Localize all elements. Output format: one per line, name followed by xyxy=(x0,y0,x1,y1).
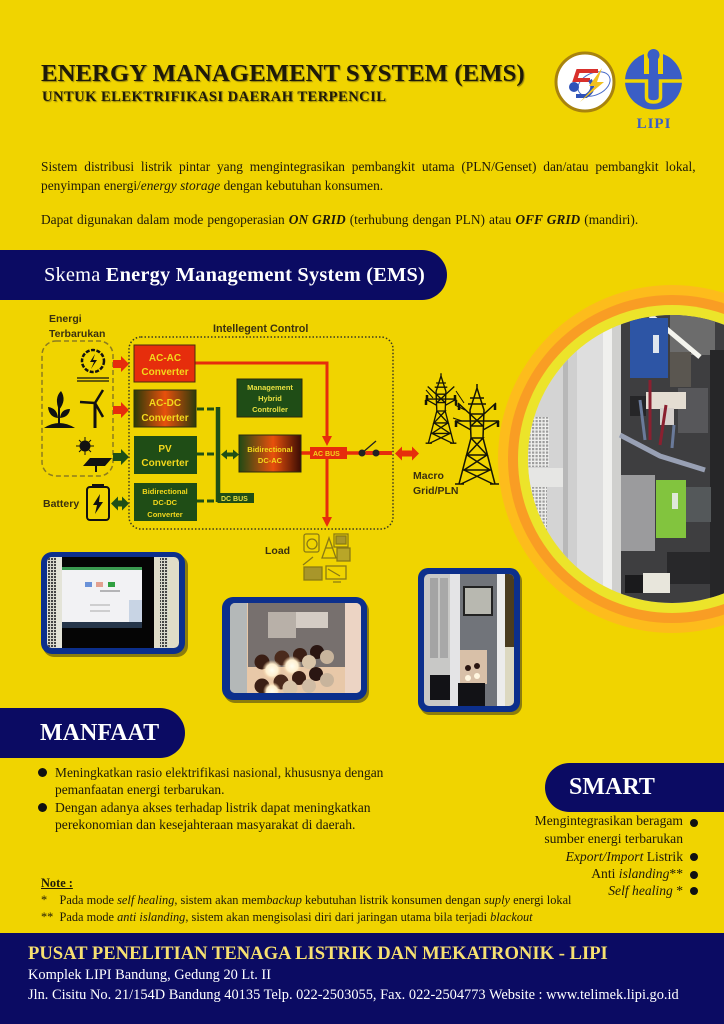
DC bus label: DC BUS xyxy=(221,496,248,503)
management hybrid controller xyxy=(237,379,302,417)
bidirectional DC-DC converter: Bidirectional xyxy=(142,487,188,496)
benefits list: Dengan adanya akses terhadap listrik dapat meningkatkan xyxy=(55,800,371,815)
AC-DC converter: AC-DC xyxy=(149,398,181,409)
PV converter: Converter xyxy=(141,458,189,469)
logos xyxy=(554,49,682,132)
PV converter xyxy=(134,436,197,474)
transmission towers xyxy=(426,373,499,484)
logo: LIPI: LIPI xyxy=(637,116,671,132)
intro paragraph xyxy=(41,159,696,193)
intro paragraph: Sistem distribusi listrik pintar yang mengintegrasikan pembangkit utama (PLN/Genset) dan/atau pembangkit lokal, xyxy=(41,159,696,174)
heading: Skema EMS: Skema Energy Management System (EMS) xyxy=(44,264,425,286)
renewable energy group: Terbarukan xyxy=(49,328,105,340)
heading: Manfaat: MANFAAT xyxy=(40,720,159,746)
AC-AC converter: AC-AC xyxy=(149,353,181,364)
photo circle: EMS cabinet xyxy=(498,285,724,633)
heading: Skema EMS xyxy=(0,250,447,300)
notes xyxy=(41,876,572,924)
notes: Note : xyxy=(41,876,73,890)
smart list: Export/Import Listrik xyxy=(566,849,683,864)
management hybrid controller: Management xyxy=(247,383,293,392)
heading: Manfaat xyxy=(0,708,185,758)
logo: anniversary badge xyxy=(556,53,614,111)
benefits list xyxy=(38,765,384,832)
management hybrid controller: Hybrid xyxy=(258,394,282,403)
smart list: Mengintegrasikan beragam xyxy=(535,813,683,828)
footer: Komplek LIPI Bandung, Gedung 20 Lt. II xyxy=(28,967,271,983)
connecting lines xyxy=(195,363,392,518)
bidirectional DC-DC converter xyxy=(134,483,197,521)
EMS schematic diagram xyxy=(41,313,500,583)
benefits list: perekonomian dan kesejahteraan masyarakat di daerah. xyxy=(55,817,355,832)
notes: ** Pada mode anti islanding, sistem akan mengisolasi diri dari jaringan utama bila terjadi blackout xyxy=(41,910,533,924)
battery: Battery xyxy=(43,498,79,510)
AC-DC converter xyxy=(134,390,196,427)
notes: * Pada mode self healing, sistem akan membackup kebutuhan listrik konsumen dengan suply energi lokal xyxy=(41,893,572,907)
intelligent control frame: Intellegent Control xyxy=(213,323,308,335)
bidirectional DC-AC: DC-AC xyxy=(258,456,283,465)
footer: Jln. Cisitu No. 21/154D Bandung 40135 Telp. 022-2503055, Fax. 022-2504773 Website : www.telimek.lipi.go.id xyxy=(28,987,679,1003)
input arrows xyxy=(111,356,129,510)
smart list: Self healing * xyxy=(608,883,683,898)
renewable energy group xyxy=(42,313,113,476)
footer xyxy=(0,933,724,1024)
macro grid label xyxy=(413,470,459,497)
AC-DC converter: Converter xyxy=(141,413,189,424)
macro grid label: Grid/PLN xyxy=(413,485,459,497)
macro grid label: Macro xyxy=(413,470,444,482)
battery xyxy=(43,484,109,520)
bidirectional DC-DC converter: Converter xyxy=(147,510,183,519)
intro paragraph: penyimpan energi/energy storage dengan kebutuhan konsumen. xyxy=(41,178,383,193)
smart list xyxy=(535,813,698,898)
smart list: sumber energi terbarukan xyxy=(544,831,683,846)
operating modes paragraph: Dapat digunakan dalam mode pengoperasian ON GRID (terhubung dengan PLN) atau OFF GRID (mandiri). xyxy=(41,212,638,227)
photo: cabinet xyxy=(418,568,522,715)
heading: Smart: SMART xyxy=(569,774,655,800)
smart list: Anti islanding** xyxy=(591,866,683,881)
PV converter: PV xyxy=(158,444,172,455)
management hybrid controller: Controller xyxy=(252,405,288,414)
AC bus label xyxy=(310,447,347,459)
bidirectional DC-AC xyxy=(239,435,301,472)
photo: light bulbs xyxy=(222,597,369,703)
benefits list: pemanfaatan energi terbarukan. xyxy=(55,782,224,797)
DC bus label xyxy=(218,493,254,503)
subtitle: UNTUK ELEKTRIFIKASI DAERAH TERPENCIL xyxy=(42,89,386,105)
bidirectional DC-DC converter: DC-DC xyxy=(153,498,178,507)
renewable energy group: Energi xyxy=(49,313,82,325)
AC-AC converter: Converter xyxy=(141,367,189,378)
AC bus label: AC BUS xyxy=(313,451,340,458)
title: ENERGY MANAGEMENT SYSTEM (EMS) xyxy=(41,60,525,87)
photo: monitor screen xyxy=(41,552,188,657)
footer: PUSAT PENELITIAN TENAGA LISTRIK DAN MEKATRONIK - LIPI xyxy=(28,943,608,964)
benefits list: Meningkatkan rasio elektrifikasi nasional, khususnya dengan xyxy=(55,765,383,780)
heading: Smart xyxy=(545,763,724,812)
load xyxy=(265,534,350,582)
intelligent control frame xyxy=(129,323,393,529)
load: Load xyxy=(265,545,290,557)
AC-AC converter xyxy=(134,345,195,382)
bidirectional DC-AC: Bidirectional xyxy=(247,445,293,454)
